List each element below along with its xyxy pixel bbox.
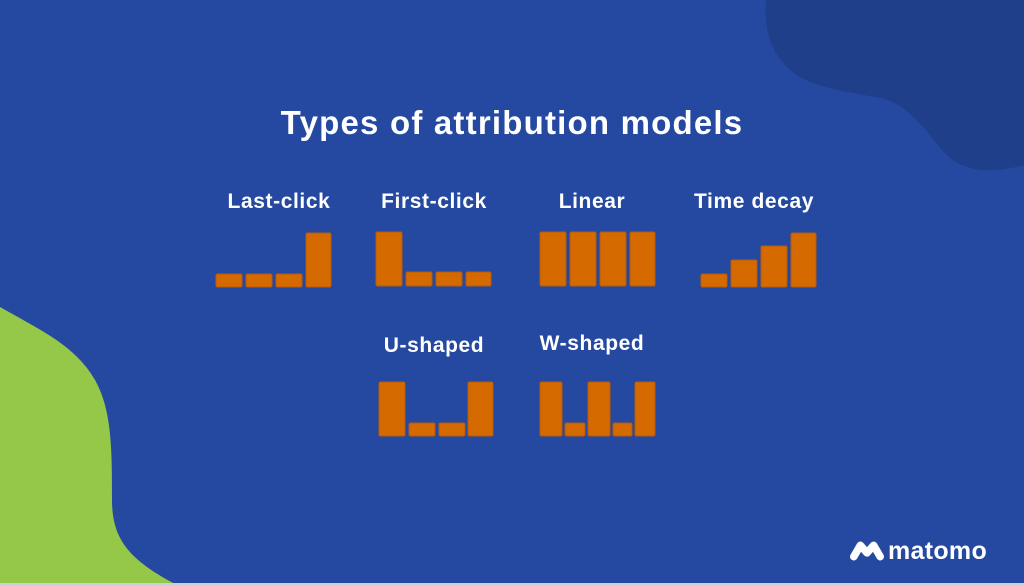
chart: last-click [216,233,331,287]
label: U-shaped: U-shaped [384,334,484,357]
label: Last-click: Last-click [228,190,330,213]
chart: linear [540,232,655,286]
title: Types of attribution models [281,104,743,141]
chart: w-shaped [540,382,655,436]
label: W-shaped: W-shaped [540,332,644,355]
chart: first-click [376,232,491,286]
logo: matomo: matomo [888,537,987,565]
label: Time decay: Time decay [694,190,814,213]
chart: u-shaped [379,382,493,436]
label: First-click: First-click [381,190,487,213]
chart: time decay [701,233,816,287]
label: Linear: Linear [559,190,625,213]
